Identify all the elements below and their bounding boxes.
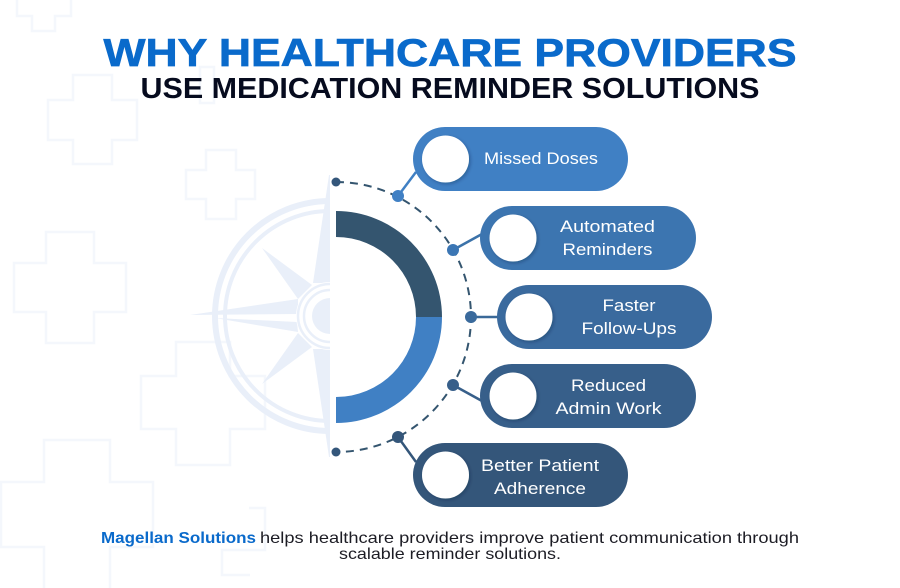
pill: Reduced Admin Work (480, 364, 696, 428)
half ring chart (336, 211, 442, 423)
pill: Missed Doses (413, 127, 628, 191)
footer text (101, 530, 799, 563)
pill: Reduced Admin Work: Admin Work (556, 399, 662, 418)
footer text: scalable reminder solutions. (339, 546, 561, 563)
title: WHY HEALTHCARE PROVIDERS (104, 32, 796, 75)
footer text: Magellan Solutions (101, 530, 256, 547)
pill: Missed Doses: Missed Doses (484, 149, 598, 168)
pill: Better Patient Adherence (413, 443, 628, 507)
title (104, 32, 796, 105)
pill: Faster Follow-Ups (497, 285, 712, 349)
pill: Automated Reminders: Automated (560, 217, 655, 236)
pill: Automated Reminders (480, 206, 696, 270)
background: medical crosses (1, 0, 265, 588)
pill: Better Patient Adherence: Better Patient (481, 456, 599, 475)
title: USE MEDICATION REMINDER SOLUTIONS (140, 73, 760, 105)
footer text: helps healthcare providers improve patient communication through (260, 530, 799, 547)
pill: Faster Follow-Ups: Faster (602, 296, 656, 315)
pill: Automated Reminders: Reminders (562, 240, 652, 259)
dashed arc with nodes (332, 172, 498, 462)
compass watermark (190, 170, 450, 462)
pill: Better Patient Adherence: Adherence (494, 479, 586, 498)
pill: Faster Follow-Ups: Follow-Ups (582, 319, 676, 338)
pill: Reduced Admin Work: Reduced (571, 376, 646, 395)
